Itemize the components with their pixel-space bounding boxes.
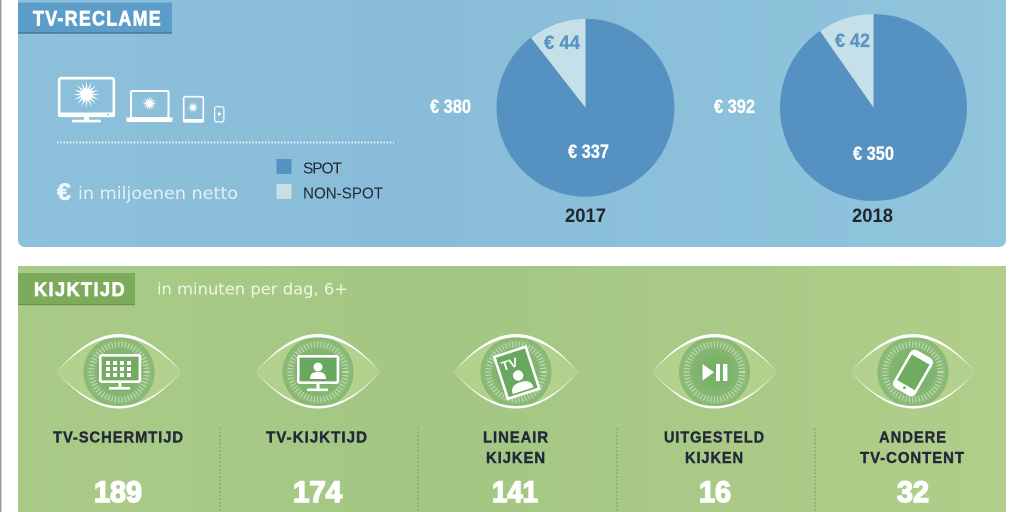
pie chart: 2018: € 42 (835, 31, 870, 52)
pie chart: 2018: 2018 (852, 206, 893, 227)
icon: eye with TV grid (56, 334, 182, 408)
pie chart: 2017: € 44 (544, 33, 580, 54)
legend (276, 159, 384, 202)
icon: eye with TV and person (256, 334, 380, 408)
column: lineair kijken: 141 (492, 476, 538, 509)
icon: laptop (126, 91, 173, 122)
column: TV-schermtijd: TV-SCHERMTIJD (53, 430, 184, 446)
column: TV-kijktijd: 174 (293, 476, 342, 509)
column: lineair kijken: LINEAIR (483, 430, 549, 446)
legend: SPOT (303, 160, 343, 178)
column: lineair kijken: KIJKEN (486, 450, 546, 467)
column: TV-schermtijd (53, 334, 184, 509)
icon: eye with play and pause (652, 334, 777, 408)
column: andere TV-content: TV-CONTENT (860, 450, 965, 467)
panel: kijktijd (18, 266, 1006, 512)
column: uitgesteld kijken: 16 (699, 476, 731, 509)
panel: TV-reclame (18, 0, 1006, 247)
column: andere TV-content (850, 334, 976, 509)
legend: NON-SPOT (303, 186, 384, 202)
icon: eye with TV guide card (454, 334, 578, 408)
column: TV-kijktijd: TV-KIJKTIJD (266, 430, 368, 446)
heading: kijktijd (18, 273, 135, 305)
pie chart: 2017: € 337 (568, 142, 609, 163)
icon: tablet (183, 97, 204, 122)
pie chart: 2017: € 380 (430, 97, 471, 118)
unit note (57, 179, 238, 206)
column: TV-kijktijd (256, 334, 380, 509)
dividers (220, 428, 815, 512)
icon: phone (215, 107, 224, 122)
column: andere TV-content: 32 (897, 476, 929, 509)
heading: TV-reclame: TV-RECLAME (33, 8, 162, 30)
unit note: € (57, 179, 71, 206)
column: uitgesteld kijken: UITGESTELD (664, 430, 765, 446)
heading: TV-reclame (18, 2, 172, 34)
column: lineair kijken (454, 334, 578, 509)
pie chart: 2017 (430, 19, 674, 227)
dotted divider (57, 142, 394, 144)
icon: eye with TV guide card: TV (499, 354, 520, 374)
heading: kijktijd: KIJKTIJD (34, 279, 126, 301)
column: uitgesteld kijken (652, 334, 777, 509)
subtitle: in minuten per dag, 6+ (157, 280, 348, 298)
icon: television (58, 78, 115, 122)
pie chart: 2018: € 392 (714, 97, 755, 118)
pie chart: 2018 (714, 14, 967, 227)
pie chart: 2018: € 350 (853, 144, 894, 165)
column: TV-schermtijd: 189 (94, 476, 142, 509)
icon: eye with smartphone (850, 334, 976, 408)
page edge line (0, 0, 2, 512)
column: andere TV-content: ANDERE (879, 430, 947, 446)
unit note: in miljoenen netto (78, 184, 238, 204)
column: uitgesteld kijken: KIJKEN (685, 450, 744, 467)
pie chart: 2017: 2017 (565, 206, 606, 227)
